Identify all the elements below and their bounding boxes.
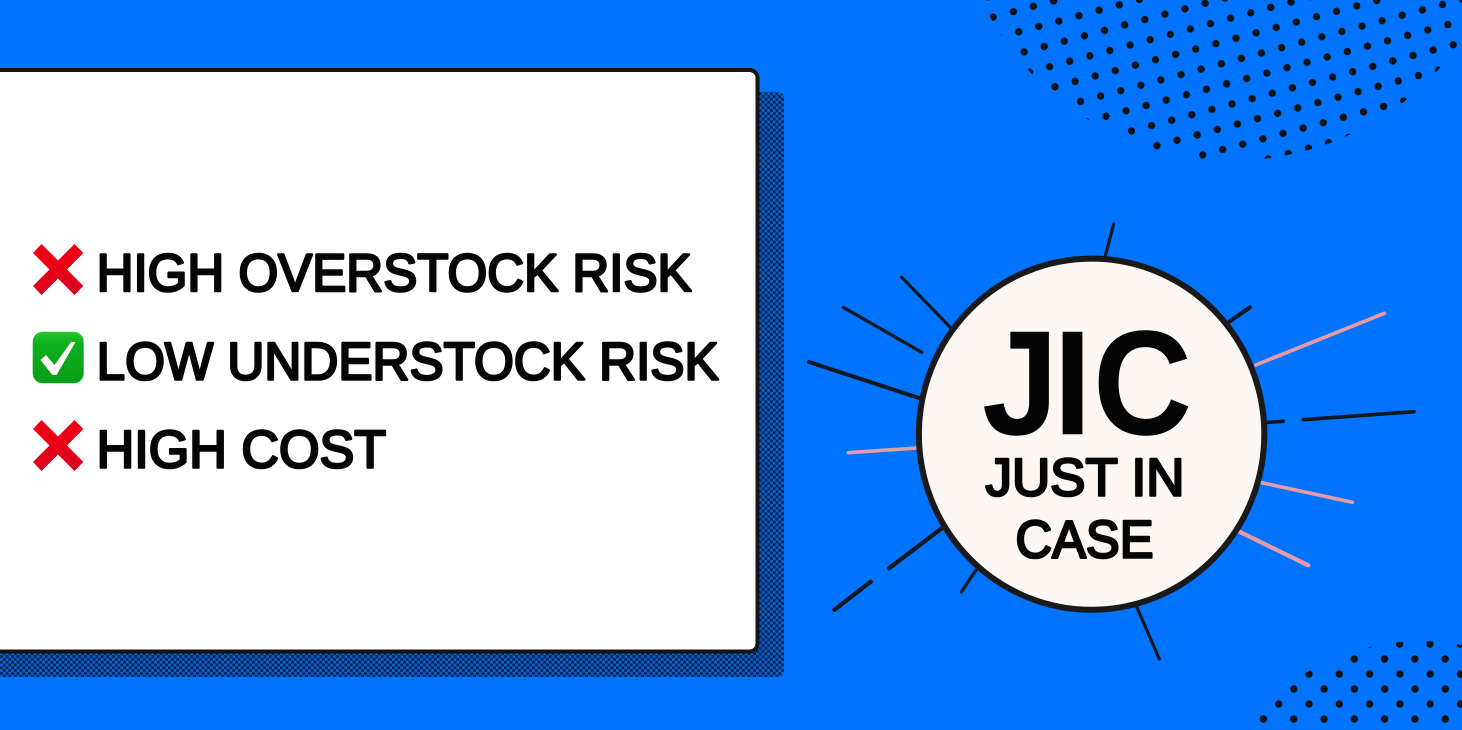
- icon: red cross: [33, 420, 83, 471]
- dithered card shadow: [0, 92, 784, 677]
- icon: red cross: [33, 244, 83, 295]
- burst rays around circle: [809, 224, 1414, 659]
- text: low understock risk: LOW UNDERSTOCK RISK: [97, 332, 719, 391]
- halftone dot circle: top right: [986, 0, 1462, 159]
- panel: white card: [0, 70, 758, 652]
- text: high cost: HIGH COST: [97, 421, 386, 480]
- text: just in: JUST IN: [986, 448, 1184, 507]
- text: high overstock risk: HIGH OVERSTOCK RISK: [97, 244, 692, 303]
- text: JIC: JIC: [982, 300, 1192, 467]
- list row: low understock risk: [33, 332, 719, 391]
- badge: JIC circle: [919, 259, 1264, 610]
- halftone dot circle: bottom right: [1260, 640, 1462, 723]
- icon: green check box: [33, 332, 84, 383]
- list row: high overstock risk: [33, 244, 692, 303]
- list row: high cost: [33, 420, 386, 480]
- text: case: CASE: [1016, 510, 1154, 569]
